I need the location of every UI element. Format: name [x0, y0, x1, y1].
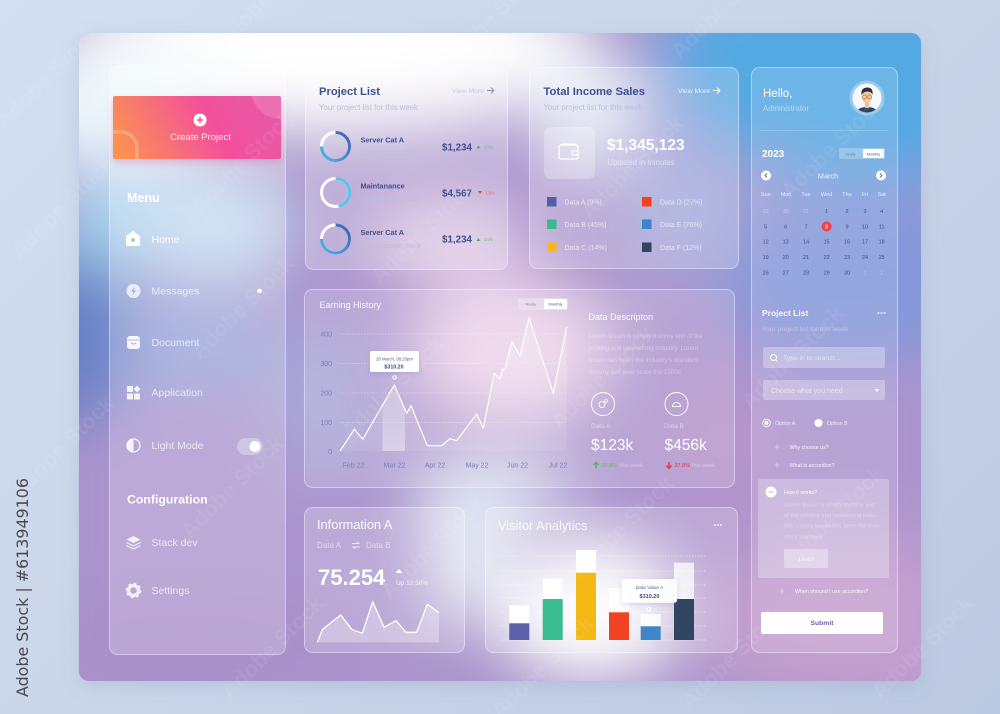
panel: right column: [752, 68, 898, 652]
accordion: how it works: How it works?: [784, 490, 817, 496]
watermarks: Adobe Stock: [336, 330, 449, 444]
calendar: 25: [879, 255, 885, 261]
calendar: 14: [803, 240, 809, 246]
stat: data a: $123k: [591, 437, 633, 454]
toggle: yearly monthly: [839, 148, 885, 159]
row: maintanance: [322, 178, 495, 206]
calendar: Wed: [821, 192, 832, 198]
line chart: earnings: Feb 22: [343, 462, 365, 470]
link: view more: View More: [678, 88, 710, 95]
stat: data b: 37.8%: [674, 463, 690, 469]
divider: [760, 130, 888, 132]
heading: configuration: Configuration: [127, 492, 208, 506]
line chart: earnings: Jul 22: [549, 462, 567, 470]
data switch labels: Data B: [366, 541, 390, 550]
calendar: Mon: [781, 192, 791, 198]
accordion: how it works: [758, 479, 889, 578]
watermarks: Adobe Stock: [866, 590, 979, 704]
watermarks: Adobe Stock: [6, 390, 119, 504]
line chart: earnings: 300: [320, 361, 332, 368]
calendar nav: March: [818, 171, 838, 180]
heading: data description: Data Descripton: [588, 312, 653, 322]
watermarks: Adobe Stock: [546, 320, 659, 434]
row: server cat a second: Lorem ipsum dolor: [360, 241, 421, 250]
row: server cat a: Lorem ipsum dolor: [360, 148, 421, 157]
data switch labels: [317, 541, 390, 550]
calendar: 18: [879, 240, 885, 246]
heading: earning history: Earning History: [320, 300, 382, 310]
accordion: why choose us: Why choose us?: [790, 445, 829, 451]
heading: project list: [762, 308, 885, 333]
calendar: 19: [763, 255, 769, 261]
stat: data a: this week: [620, 463, 643, 469]
select field: [763, 380, 885, 400]
radio options: Option A: [775, 421, 796, 427]
watermarks: Adobe Stock: [6, 150, 119, 264]
calendar: 31: [803, 209, 809, 215]
row: server cat a: $1,234: [442, 142, 473, 154]
updated note: Updated in minutes: [608, 158, 675, 167]
button: create project: Create Project: [170, 132, 231, 143]
watermarks: Adobe Stock: [176, 430, 289, 544]
menu dots: [714, 524, 722, 526]
calendar: 11: [879, 224, 885, 230]
calendar: 13: [783, 240, 789, 246]
watermarks: Adobe Stock: [576, 110, 689, 224]
accordion: how it works: Lorem Ipsum is simply dummy text: [784, 502, 875, 508]
tooltip: chart value: 28 March, 08:20pm: [376, 356, 413, 362]
calendar: 22: [824, 255, 830, 261]
calendar: 30: [844, 270, 850, 276]
accordion: what is accordion: What is accordion?: [790, 463, 835, 469]
calendar: 20: [783, 255, 789, 261]
panel: total income sales: [530, 68, 738, 268]
stat: data a: 37.8%: [602, 463, 617, 469]
paragraph: data description: Lorem Ipsum is simply dummy text of the: [588, 333, 703, 340]
tooltip: chart value: $310.20: [384, 364, 404, 370]
select field: Choose what you need: [771, 388, 843, 395]
row: server cat a: 24%: [484, 144, 493, 150]
nav item: messages: [126, 284, 262, 298]
stat: data a: Data A: [591, 423, 611, 430]
nav item: light mode with toggle: Light Mode: [152, 440, 204, 452]
row: server cat a second: [322, 225, 493, 253]
calendar: 7: [804, 224, 808, 230]
line chart: earnings: Apr 22: [425, 462, 445, 470]
calendar nav: [761, 170, 886, 180]
row: maintanance: Maintanance: [360, 182, 405, 190]
stock id label: Adobe Stock | #613949106: [13, 478, 32, 697]
heading: total income sales: Total Income Sales: [544, 86, 645, 98]
toggle: yearly monthly: Monthly: [548, 302, 563, 306]
legend: Data A (9%): [564, 199, 602, 206]
line chart: earnings: Jun 22: [507, 462, 528, 470]
line chart: earnings: 400: [320, 332, 332, 338]
line chart: earnings: 100: [320, 420, 332, 427]
watermarks: Adobe Stock: [376, 490, 489, 604]
calendar: 8: [825, 224, 828, 230]
calendar: 1: [825, 209, 828, 215]
nav item: document: Document: [152, 337, 199, 349]
row: server cat a second: $1,234: [442, 234, 473, 246]
calendar: 24: [862, 255, 868, 261]
calendar: 10: [862, 224, 868, 230]
watermarks: Adobe Stock: [366, 175, 479, 289]
calendar: [761, 192, 886, 276]
calendar: 2: [880, 270, 883, 276]
amount: $1,345,123: [607, 137, 685, 154]
accordion: why choose us: [774, 444, 829, 451]
row: server cat a: [322, 132, 493, 160]
paragraph: data description: [588, 333, 703, 376]
row: server cat a: Server Cat A: [360, 136, 405, 144]
toggle: yearly monthly: Yearly: [845, 152, 856, 156]
paragraph: data description: printing and typesetting industry. Lorem: [588, 345, 698, 352]
accordion: how it works: stry. Lorem Ipsum has been the indu-: [784, 524, 881, 530]
calendar: 23: [844, 255, 850, 261]
accordion: how it works: stry's standard: [784, 534, 822, 540]
metric change: Up 12,50%: [396, 580, 428, 587]
calendar: 12: [763, 240, 769, 246]
calendar: 21: [803, 255, 809, 261]
accordion: when should i use accordion: When shound I use accordion?: [795, 589, 868, 595]
sparkline: [317, 602, 439, 642]
row: maintanance: $4,567: [442, 188, 473, 200]
nav item: stack dev: Stack dev: [152, 537, 198, 549]
panel: visitor analytics: [486, 508, 738, 652]
greeting: [763, 88, 809, 113]
metric value: 75.254: [318, 565, 386, 590]
watermarks: Adobe Stock: [186, 250, 299, 364]
nav item: home: [126, 231, 180, 246]
legend: Data F (12%): [660, 245, 702, 252]
radio options: Option B: [827, 421, 848, 427]
calendar: 29: [824, 270, 830, 276]
nav item: settings: Settings: [152, 585, 189, 597]
calendar: 4: [880, 209, 883, 215]
row: maintanance: Lorem ipsum dolor: [360, 194, 421, 203]
line chart: earnings: 200: [320, 390, 332, 398]
calendar: Sat: [878, 192, 886, 198]
tooltip: data value a: Data Value A: [636, 585, 664, 591]
line chart: earnings: May 22: [466, 462, 489, 470]
calendar: 1: [863, 270, 867, 276]
calendar: Tue: [801, 192, 811, 198]
tooltip: data value a: $310.20: [640, 594, 659, 600]
button: create project: [109, 96, 284, 166]
nav item: settings: [126, 584, 189, 598]
search field: [763, 347, 885, 368]
heading: visitor analytics: Visitor Analytics: [498, 518, 587, 533]
calendar: 5: [764, 224, 767, 230]
panel: information a: [304, 508, 464, 652]
calendar: Thu: [842, 192, 852, 198]
nav item: stack dev: [126, 536, 198, 549]
row: maintanance: 13%: [486, 190, 495, 196]
nav item: application: [127, 386, 203, 400]
watermarks: Adobe Stock: [566, 470, 679, 584]
toggle: yearly monthly: Monthly: [867, 152, 880, 156]
nav item: home: Home: [152, 234, 180, 246]
stat: data b: $456k: [664, 437, 707, 454]
heading: information a: Information A: [317, 517, 393, 532]
subtitle: Your project list for this week: [319, 103, 418, 112]
avatar: [850, 80, 884, 116]
stat: data a: [591, 392, 643, 469]
row: server cat a second: Server Cat A: [360, 228, 405, 237]
nav item: light mode with toggle: [127, 438, 263, 455]
calendar: 30: [783, 209, 789, 215]
panel: sidebar navigation: [109, 66, 286, 655]
calendar: 26: [763, 270, 769, 276]
search field: Type in to search ..: [783, 355, 841, 362]
calendar: 17: [862, 240, 868, 246]
line chart: earnings: Mar 22: [384, 462, 405, 470]
legend: Data C (14%): [564, 245, 607, 252]
metric change: [396, 569, 428, 587]
tooltip: chart value: [370, 351, 419, 379]
toggle: yearly monthly: [518, 298, 568, 310]
year: 2023: [762, 149, 785, 160]
button: submit: Submit: [810, 620, 834, 627]
stat: data b: [664, 392, 715, 469]
link: view more: View More: [452, 88, 484, 95]
panel: earning history: [304, 290, 734, 488]
gradient dashboard background: [76, 33, 922, 688]
panel: project list: [306, 68, 508, 270]
calendar: 15: [824, 240, 830, 246]
greeting: Administrator: [763, 104, 809, 113]
watermarks: Adobe Stock: [736, 300, 849, 414]
legend: [547, 197, 702, 252]
calendar: Sun: [761, 192, 771, 198]
accordion: what is accordion: [774, 462, 835, 469]
calendar: 29: [763, 209, 769, 215]
calendar: 27: [783, 270, 789, 276]
calendar: Fri: [862, 192, 868, 198]
watermarks: Adobe Stock: [186, 105, 299, 219]
heading: project list: Your project list for this week: [762, 326, 849, 333]
legend: Data E (76%): [660, 222, 702, 229]
stat: data b: Data B: [664, 423, 684, 430]
accordion: how it works: of the printing and typesetting indu-: [784, 513, 876, 519]
toggle: yearly monthly: Yearly: [525, 302, 536, 306]
heading: project list: Project List: [319, 86, 380, 98]
accordion: how it works: Learn: [798, 556, 815, 563]
calendar: 28: [803, 270, 809, 276]
calendar: 3: [863, 209, 867, 215]
nav item: document: [127, 336, 199, 349]
heading: project list: Project List: [762, 308, 808, 318]
watermarks: Adobe Stock: [776, 460, 889, 574]
calendar: 2: [845, 209, 849, 215]
watermarks: Adobe Stock: [776, 90, 889, 204]
nav item: application: Application: [152, 387, 203, 399]
data switch labels: Data A: [317, 541, 342, 550]
stat: data b: this week: [692, 463, 715, 469]
line chart: earnings: 0: [328, 449, 332, 456]
paragraph: data description: Ipsum has been the industry's standard: [588, 357, 699, 364]
watermarks: Adobe Stock: [216, 590, 329, 704]
legend: Data D (27%): [660, 199, 702, 206]
watermarks: Adobe Stock: [676, 600, 789, 714]
radio options: [763, 419, 848, 427]
tooltip: data value a: [622, 579, 677, 611]
nav item: messages: Messages: [152, 286, 199, 298]
icon: wallet: [544, 127, 595, 179]
legend: Data B (45%): [564, 222, 607, 229]
heading: menu: Menu: [127, 191, 160, 205]
subtitle: Your project list for this week: [544, 103, 643, 112]
greeting: Hello,: [763, 88, 792, 100]
line chart: earnings: [320, 318, 567, 470]
button: submit: [761, 612, 883, 634]
calendar: 9: [845, 224, 849, 230]
calendar: 6: [784, 224, 787, 230]
bar chart: [500, 550, 706, 640]
paragraph: data description: dummy text ever since the 1500s: [588, 369, 681, 376]
row: server cat a second: 24%: [484, 237, 493, 242]
calendar: 16: [844, 240, 850, 246]
